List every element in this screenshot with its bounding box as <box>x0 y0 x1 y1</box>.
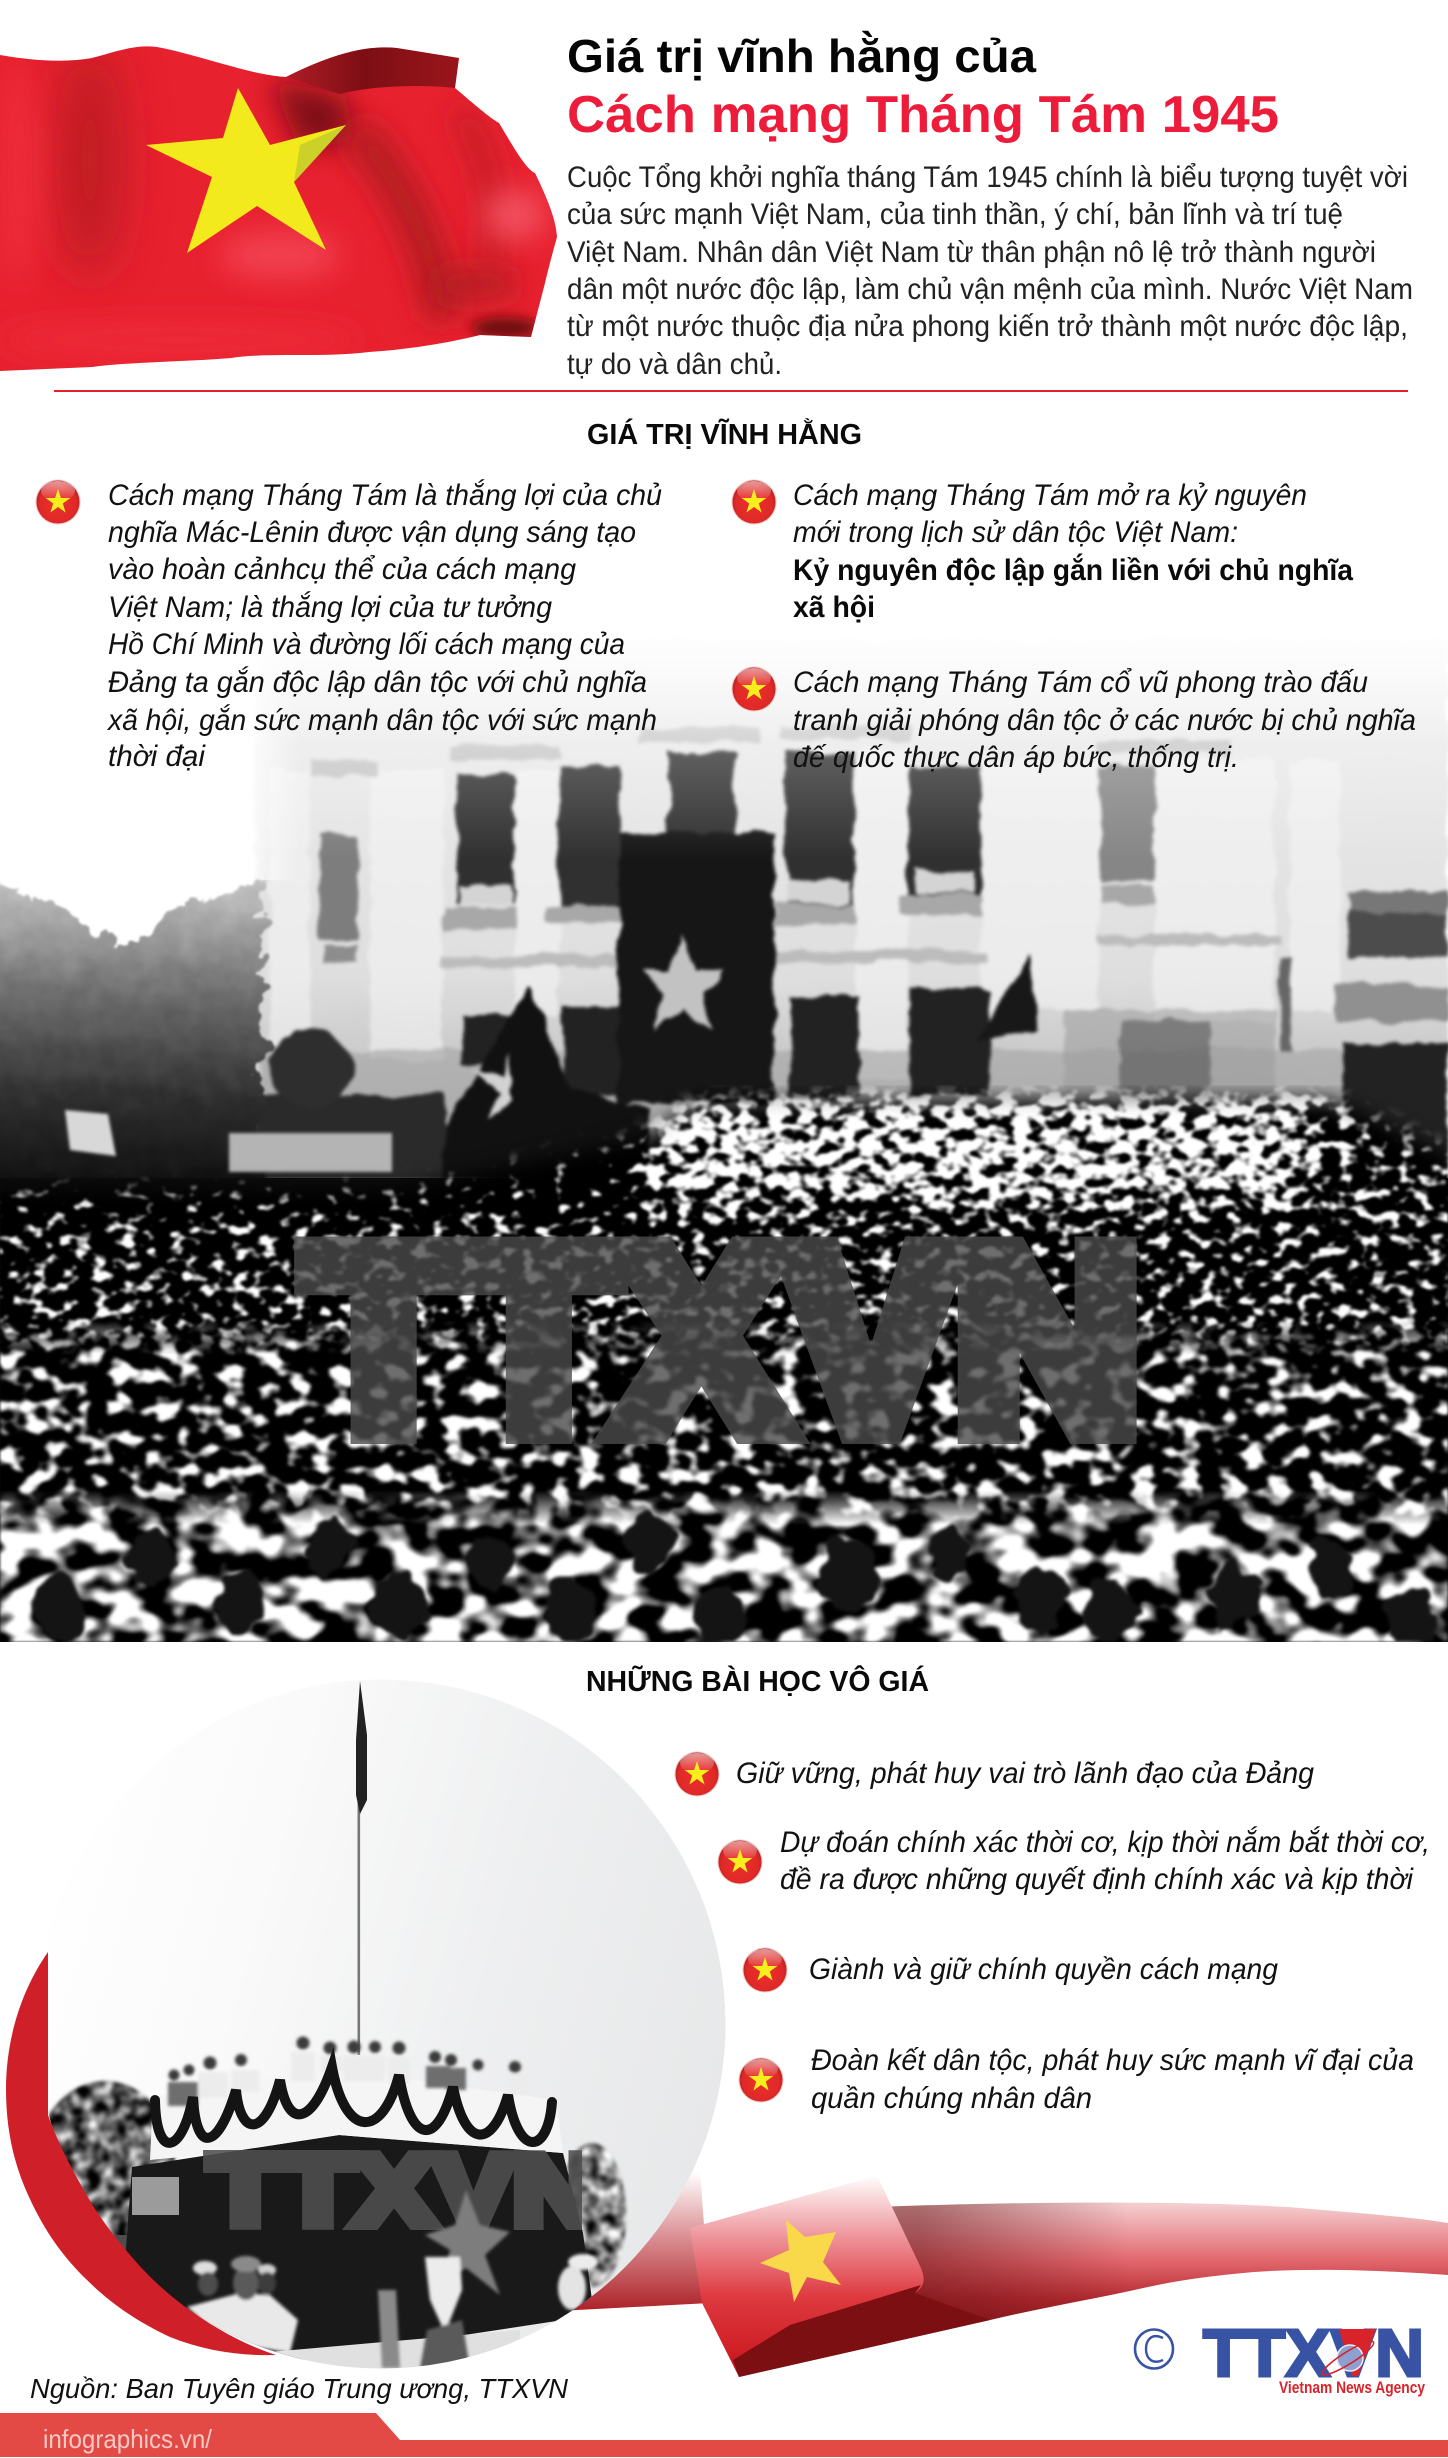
crowd texture, near rows <box>0 1490 1448 1642</box>
flag illustration <box>0 40 570 380</box>
title: Giá trị vĩnh hằng của <box>567 30 1036 82</box>
intro paragraph: tự do và dân chủ. <box>567 348 782 381</box>
crowd texture, far rows <box>0 1085 1448 1365</box>
value text 3: Cách mạng Tháng Tám cổ vũ phong trào đấu <box>793 666 1368 699</box>
value text 1 <box>106 479 662 773</box>
value text 1: thời đại <box>108 740 206 773</box>
footer bar <box>0 2413 1448 2457</box>
star on ribbon <box>760 2220 841 2302</box>
website label: infographics.vn/ <box>43 2424 213 2454</box>
value text 3: đế quốc thực dân áp bức, thống trị. <box>793 741 1239 774</box>
heading: những bài học vô giá: NHỮNG BÀI HỌC VÔ GIÁ <box>586 1664 929 1698</box>
intro paragraph: của sức mạnh Việt Nam, của tinh thần, ý chí, bản lĩnh và trí tuệ <box>567 198 1343 231</box>
value text 3 <box>793 666 1416 774</box>
trees on the left <box>0 878 262 1200</box>
value text 1: vào hoàn cảnhcụ thể của cách mạng <box>108 553 576 586</box>
stand platform <box>150 2093 563 2160</box>
watermark TTXVN: TTXVN <box>306 1195 1139 1484</box>
red crescent <box>6 1952 276 2355</box>
icon: flag bullet <box>738 2058 784 2102</box>
people in front <box>187 2190 598 2368</box>
lesson 2 <box>718 1826 1430 1896</box>
trees <box>35 2081 626 2325</box>
lesson 4 <box>738 2044 1414 2115</box>
source line: Nguồn: Ban Tuyên giáo Trung ương, TTXVN <box>30 2373 569 2404</box>
lesson text 4 <box>811 2044 1414 2115</box>
flags <box>974 954 1039 1043</box>
value text 2 <box>793 479 1353 624</box>
intro paragraph: từ một nước thuộc địa nửa phong kiến trở thành một nước độc lập, <box>567 310 1408 343</box>
opera house building <box>255 640 1448 1250</box>
lesson text 2 <box>780 1826 1430 1896</box>
icon: flag bullet <box>732 666 776 712</box>
icon: copyright <box>1135 2330 1173 2368</box>
value text 2: mới trong lịch sử dân tộc Việt Nam: <box>793 516 1238 549</box>
white fade over the building top <box>0 600 1448 860</box>
icon: flag bullet <box>742 1948 788 1992</box>
red square <box>690 2177 924 2377</box>
value text 2: Kỷ nguyên độc lập gắn liền với chủ nghĩa <box>793 553 1353 587</box>
ribbon band <box>739 2203 1448 2377</box>
balcony and awning <box>1348 891 1448 913</box>
crowd texture, middle rows <box>0 1320 1448 1530</box>
crowd photograph: August Revolution rally <box>0 600 1448 1650</box>
value text 1: Việt Nam; là thắng lợi của tư tưởng <box>108 591 552 624</box>
dark fold <box>733 2285 990 2377</box>
circular photo: independence day stand <box>35 1670 748 2380</box>
ledges and column bases <box>440 935 1279 967</box>
title <box>567 30 1279 144</box>
doors <box>462 990 1448 1169</box>
value text 1: Cách mạng Tháng Tám là thắng lợi của chủ <box>108 479 662 512</box>
value text 1: nghĩa Mác-Lênin được vận dụng sáng tạo <box>108 516 636 549</box>
dark people and bush at stage <box>255 1095 445 1185</box>
ribbon with flag, bottom right <box>540 2172 1448 2385</box>
flag pole and flag <box>356 1681 367 2055</box>
dark banner with star <box>619 832 774 1104</box>
lesson text 2: đề ra được những quyết định chính xác và kịp thời <box>780 1863 1414 1896</box>
lesson 1 <box>674 1752 1314 1796</box>
podium and small flag <box>229 1133 392 1172</box>
value text 1: Đảng ta gắn độc lập dân tộc với chủ nghĩa <box>108 666 647 699</box>
upper cornice <box>310 726 1230 776</box>
lesson 3 <box>742 1948 1278 1992</box>
value text 3: tranh giải phóng dân tộc ở các nước bị chủ nghĩa <box>793 704 1416 737</box>
stand dark body <box>120 2135 592 2360</box>
lesson text 1: Giữ vững, phát huy vai trò lãnh đạo của Đảng <box>736 1757 1314 1790</box>
icon: flag bullet <box>674 1752 720 1796</box>
lesson text 4: quần chúng nhân dân <box>811 2082 1092 2115</box>
icon: flag bullet <box>36 480 80 524</box>
crowd: dark underlay <box>0 1178 1448 1642</box>
logo: TTXVN Vietnam News Agency: TTXVN <box>1203 2316 1424 2391</box>
intro paragraph: Việt Nam. Nhân dân Việt Nam từ thân phận nô lệ trở thành người <box>567 236 1376 269</box>
leaders on the stand <box>168 2036 529 2106</box>
lesson text 4: Đoàn kết dân tộc, phát huy sức mạnh vĩ đại của <box>811 2044 1414 2077</box>
value text 1: xã hội, gắn sức mạnh dân tộc với sức mạnh <box>106 704 657 737</box>
flag star <box>146 88 346 253</box>
ribbon tail <box>540 2172 710 2312</box>
garland <box>155 2067 552 2143</box>
lesson text 3: Giành và giữ chính quyền cách mạng <box>809 1953 1278 1986</box>
value item 3 <box>732 666 1416 774</box>
value text 2: Cách mạng Tháng Tám mở ra kỷ nguyên <box>793 479 1307 512</box>
value item 1 <box>36 479 662 773</box>
icon: flag bullet <box>718 1840 762 1884</box>
lamp decoration <box>1065 1010 1275 1100</box>
ribbon shading next to the square <box>881 2202 1112 2345</box>
heading: giá trị vĩnh hằng: GIÁ TRỊ VĨNH HẰNG <box>587 417 862 451</box>
balustrades <box>445 885 1154 930</box>
value text 2: xã hội <box>793 591 875 624</box>
heads in the near rows <box>34 1515 1436 1650</box>
value text 1: Hồ Chí Minh và đường lối cách mạng của <box>108 628 625 661</box>
title: Cách mạng Tháng Tám 1945 <box>567 86 1279 144</box>
intro paragraph <box>567 161 1413 381</box>
icon: flag bullet <box>732 480 776 524</box>
value item 2 <box>732 479 1353 624</box>
flag back fold <box>286 47 459 94</box>
star on stand <box>425 2190 510 2295</box>
watermark TTXVN small: TTXVN <box>209 2135 599 2245</box>
floor <box>275 2330 520 2368</box>
sign <box>132 2177 179 2215</box>
